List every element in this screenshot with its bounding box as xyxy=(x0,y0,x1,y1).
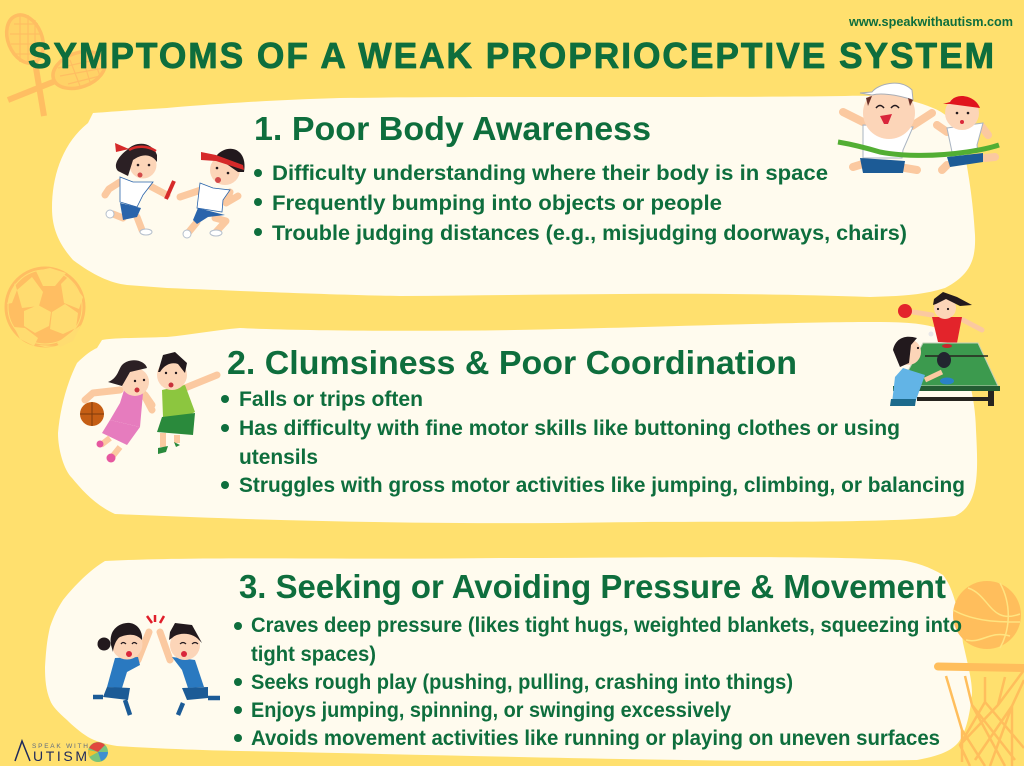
bullets 2: Struggles with gross motor activities like jumping, climbing, or balancing xyxy=(239,474,965,497)
heading 3: 3. Seeking or Avoiding Pressure & Movement xyxy=(239,568,946,605)
illustration: table tennis players xyxy=(890,292,1000,406)
bullets 3 xyxy=(234,614,962,750)
panel: clumsiness background xyxy=(58,322,977,523)
icon: soccer ball xyxy=(6,268,84,347)
icon: basketball hoop xyxy=(938,666,1024,766)
section 1: poor body awareness xyxy=(254,110,907,245)
heading 1: 1. Poor Body Awareness xyxy=(254,110,651,147)
bullets 3: Avoids movement activities like running or playing on uneven surfaces xyxy=(251,727,940,750)
title: SYMPTOMS OF A WEAK PROPRIOCEPTIVE SYSTEM xyxy=(28,35,996,76)
bullets 1: Trouble judging distances (e.g., misjudging doorways, chairs) xyxy=(272,222,907,245)
bullets 3: Enjoys jumping, spinning, or swinging excessively xyxy=(251,699,731,722)
bullets 2: utensils xyxy=(239,446,318,469)
logo: speak with autism: UTISM xyxy=(33,748,87,764)
bullets 3: Seeks rough play (pushing, pulling, crashing into things) xyxy=(251,671,793,694)
illustration: basketball players xyxy=(80,352,217,462)
panel: seeking or avoiding background xyxy=(45,557,972,761)
bullets 2: Falls or trips often xyxy=(239,388,423,411)
bullets 3: tight spaces) xyxy=(251,643,376,666)
logo: speak with autism: SPEAK WITH xyxy=(32,743,88,750)
bullets 1: Difficulty understanding where their body is in space xyxy=(272,162,828,185)
bullets 1: Frequently bumping into objects or people xyxy=(272,192,722,215)
bullets 1 xyxy=(254,162,907,245)
heading 2: 2. Clumsiness & Poor Coordination xyxy=(227,344,797,381)
illustration: relay runners xyxy=(105,143,245,238)
bullets 2: Has difficulty with fine motor skills like buttoning clothes or using xyxy=(239,417,900,440)
illustration: high five kids xyxy=(93,615,220,715)
section 3: seeking or avoiding pressure and movement xyxy=(234,568,962,750)
website url: www.speakwithautism.com xyxy=(848,15,1013,29)
bullets 2 xyxy=(221,388,965,497)
bullets 3: Craves deep pressure (likes tight hugs, weighted blankets, squeezing into xyxy=(251,614,962,637)
illustration: finish line runners xyxy=(838,83,999,173)
icon: basketball xyxy=(953,581,1021,649)
logo: speak with autism xyxy=(15,741,108,764)
panel: poor body awareness background xyxy=(52,96,975,297)
section 2: clumsiness and poor coordination xyxy=(221,344,965,497)
icon: crossed tennis rackets xyxy=(0,9,110,116)
